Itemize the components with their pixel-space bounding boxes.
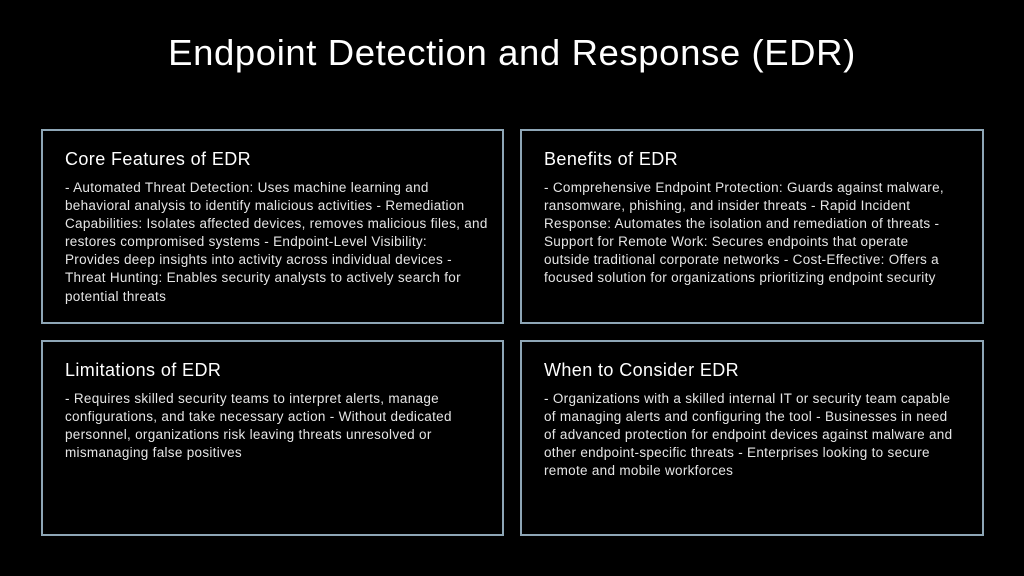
text: when to consider: of managing alerts and configuring the tool - Businesses in need (544, 409, 947, 424)
text: benefits: ransomware, phishing, and insider threats - Rapid Incident (544, 198, 910, 213)
heading: when to consider: When to Consider EDR (544, 360, 739, 380)
text: when to consider: - Organizations with a skilled internal IT or security team capable (544, 391, 950, 406)
title: Endpoint Detection and Response (EDR) (168, 32, 856, 73)
text: benefits: Response: Automates the isolation and remediation of threats - (544, 216, 939, 231)
panel: limitations (41, 340, 504, 536)
text: benefits: focused solution for organizations prioritizing endpoint security (544, 270, 936, 285)
text: core features: Threat Hunting: Enables security analysts to actively search for (65, 270, 461, 285)
text: when to consider: of advanced protection for endpoint devices against malware and (544, 427, 952, 442)
text: limitations: mismanaging false positives (65, 445, 242, 460)
text: core features (65, 180, 488, 304)
text: limitations: personnel, organizations risk leaving threats unresolved or (65, 427, 432, 442)
text: core features: Provides deep insights into activity across individual devices - (65, 252, 452, 267)
text: limitations (65, 391, 452, 460)
text: when to consider (544, 391, 952, 478)
text: when to consider: other endpoint-specific threats - Enterprises looking to secure (544, 445, 930, 460)
text: core features: behavioral analysis to identify malicious activities - Remediation (65, 198, 464, 213)
panel: benefits (520, 129, 984, 324)
panel: core features (41, 129, 504, 324)
text: limitations: - Requires skilled security teams to interpret alerts, manage (65, 391, 439, 406)
text: benefits: Support for Remote Work: Secures endpoints that operate (544, 234, 908, 249)
heading: limitations: Limitations of EDR (65, 360, 221, 380)
text: when to consider: remote and mobile workforces (544, 463, 733, 478)
text: core features: restores compromised systems - Endpoint-Level Visibility: (65, 234, 427, 249)
panel: when to consider (520, 340, 984, 536)
text: benefits: - Comprehensive Endpoint Protection: Guards against malware, (544, 180, 944, 195)
text: benefits (544, 180, 944, 285)
heading: core features: Core Features of EDR (65, 149, 251, 169)
text: core features: potential threats (65, 289, 166, 304)
text: core features: Capabilities: Isolates affected devices, removes malicious files, and (65, 216, 488, 231)
text: limitations: configurations, and take necessary action - Without dedicated (65, 409, 452, 424)
text: core features: - Automated Threat Detection: Uses machine learning and (65, 180, 429, 195)
heading: benefits: Benefits of EDR (544, 149, 678, 169)
text: benefits: outside traditional corporate networks - Cost-Effective: Offers a (544, 252, 939, 267)
